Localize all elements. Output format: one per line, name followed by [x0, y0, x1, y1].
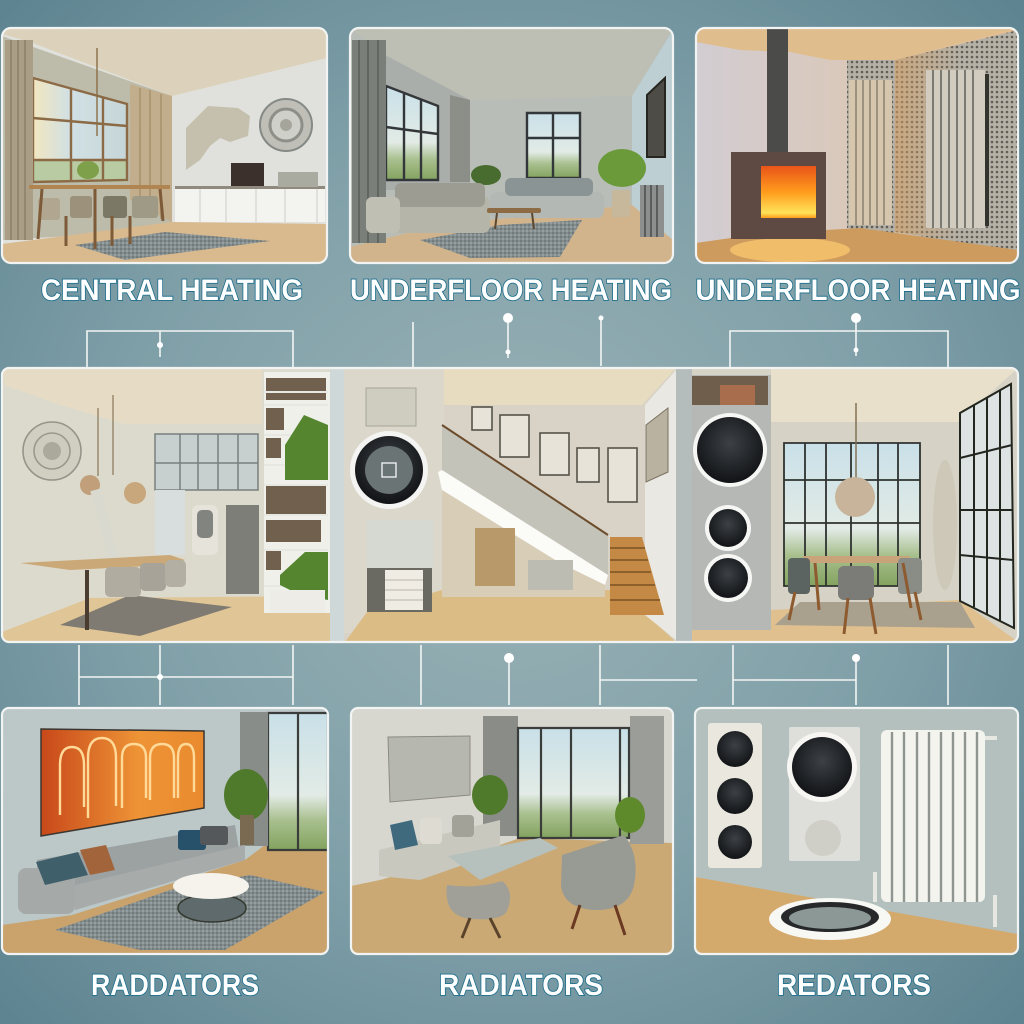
glow on floor: [730, 238, 850, 262]
heating panel: [41, 729, 204, 836]
flue: [767, 28, 788, 153]
radiator left: [849, 80, 892, 225]
curtains: [352, 40, 470, 243]
plant: [224, 769, 268, 845]
picture: [647, 78, 665, 157]
caption: radiators: RADIATORS: [439, 969, 603, 1002]
window: [268, 713, 328, 850]
plants: [472, 775, 645, 833]
panel: underfloor heating room one: [350, 28, 673, 263]
floor: [2, 222, 327, 263]
curtains: [5, 40, 172, 240]
window: [33, 78, 127, 182]
coffee table: [173, 873, 249, 922]
sofa left: [366, 183, 490, 233]
dining table: [29, 185, 170, 249]
lounge chairs: [447, 835, 636, 938]
floor: [695, 877, 1018, 954]
panel: central heating room: [2, 28, 327, 263]
divider wall right: [676, 368, 692, 642]
panel: underfloor heating room two with stove: [696, 28, 1018, 263]
sofa: [379, 815, 500, 880]
panel: living room with lounge chairs: [351, 708, 673, 954]
rug: [55, 875, 325, 950]
panel: controls and radiator: [695, 708, 1018, 954]
panel frames: bottom row: [2, 708, 1018, 954]
caption: raddators: RADDATORS: [91, 969, 259, 1002]
heading: underfloor heating centre: UNDERFLOOR HEATING: [350, 274, 672, 307]
floor: [351, 838, 673, 954]
rug: [420, 220, 582, 258]
connector lines: lower: [79, 645, 948, 705]
panel frame: middle row: [2, 368, 1018, 642]
coffee table: [448, 838, 558, 880]
sideboard: [175, 172, 325, 222]
panel: living room with heating panel: [2, 708, 328, 954]
curtains: [483, 716, 664, 844]
sofa right: [505, 178, 604, 218]
room: dining room with bookcase: [2, 368, 330, 642]
stove: [731, 152, 826, 239]
panel frames: top row: [2, 28, 1018, 263]
room: dining room with thermostats: [692, 368, 1018, 642]
floor: [2, 845, 328, 954]
room: staircase: [344, 368, 676, 642]
sofa: [18, 825, 245, 914]
coffee table: [487, 208, 541, 229]
window: [518, 728, 629, 838]
radiator right: [926, 70, 989, 228]
potted plant: [77, 161, 99, 179]
floor vent disc: [769, 898, 891, 940]
wall art: [388, 736, 470, 802]
thermostat panel: [787, 727, 860, 861]
rug: [75, 232, 270, 260]
heading: central heating: CENTRAL HEATING: [41, 274, 303, 307]
floor: [696, 228, 1018, 263]
control strip: [708, 723, 762, 868]
radiator: [875, 730, 997, 927]
wall art: [186, 99, 312, 170]
connector lines: upper: [87, 313, 948, 375]
panel: middle row interior strip: [2, 368, 1018, 642]
window back: [527, 113, 580, 178]
curtain: [240, 712, 268, 846]
caption: redators: REDATORS: [777, 969, 931, 1002]
plant: [471, 149, 646, 217]
tv: [231, 163, 264, 187]
pendant lamp: [96, 48, 98, 136]
window left: [386, 86, 438, 180]
floor: [350, 205, 673, 263]
radiator: [640, 185, 664, 237]
